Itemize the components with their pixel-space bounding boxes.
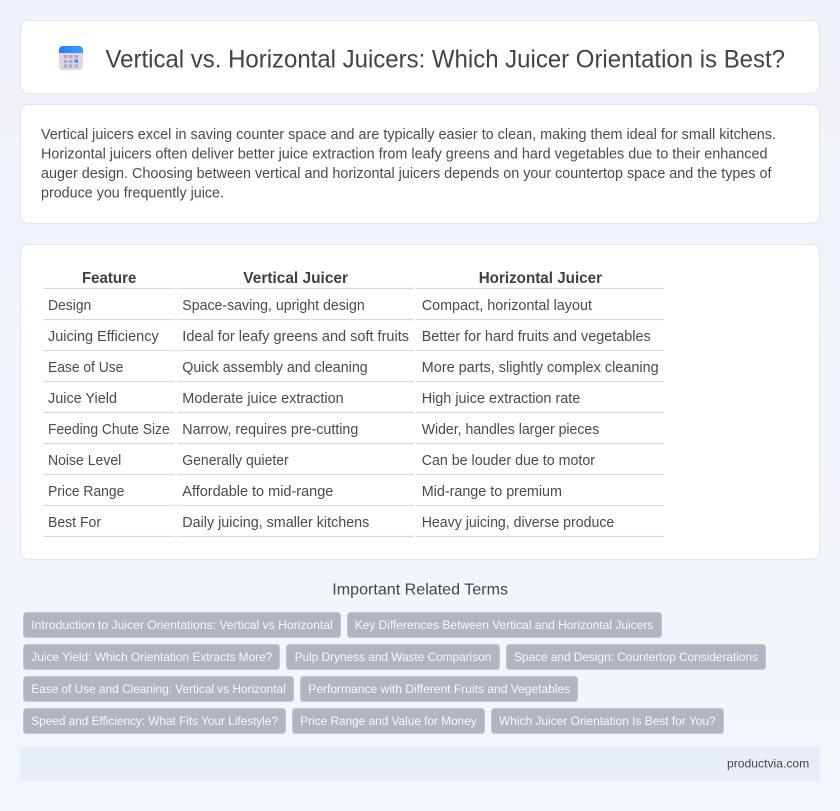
table row: Best For: Heavy juicing, diverse produce (422, 515, 614, 531)
table header row (43, 270, 664, 288)
tag: space and design: Space and Design: Countertop Considerations (514, 650, 758, 664)
tag: performance: Performance with Different Fruits and Vegetables (308, 682, 570, 696)
icon: calendar (59, 46, 83, 70)
panel: related term tags (24, 612, 766, 734)
table row: Juicing Efficiency: Better for hard fruits and vegetables (422, 329, 651, 345)
table row: Design: Space-saving, upright design (182, 298, 365, 314)
tag: key differences: Key Differences Between Vertical and Horizontal Juicers (355, 618, 653, 632)
table row: Noise Level: Noise Level (48, 453, 121, 469)
table row: Best For: Best For (48, 515, 101, 531)
table row: Feeding Chute Size: Feeding Chute Size (48, 422, 170, 438)
table row: Feeding Chute Size: Narrow, requires pre-cutting (182, 422, 358, 438)
table header row: Vertical Juicer (243, 270, 348, 287)
tag: juice yield (24, 644, 280, 670)
table row: Feeding Chute Size (43, 422, 664, 444)
table row: Noise Level: Can be louder due to motor (422, 453, 595, 469)
footer (20, 747, 820, 781)
table row: Design (43, 298, 664, 320)
text block: summary paragraph: Horizontal juicers often deliver better juice extraction from leafy greens and hard vegetables due to their enhanced (41, 146, 768, 162)
panel: introduction text (20, 104, 820, 224)
table row: Price Range: Affordable to mid-range (182, 484, 333, 500)
tag: which orientation (492, 708, 724, 734)
tag: speed and efficiency (24, 708, 286, 734)
tag: price range (292, 708, 484, 734)
table row: Price Range (43, 484, 664, 506)
panel: title header (20, 20, 820, 94)
tag: ease of use: Ease of Use and Cleaning: Vertical vs Horizontal (31, 682, 286, 696)
table row: Ease of Use: More parts, slightly complex cleaning (422, 360, 659, 376)
table row: Juicing Efficiency: Ideal for leafy greens and soft fruits (182, 329, 409, 345)
tag: which orientation: Which Juicer Orientation Is Best for You? (499, 714, 716, 728)
table row: Juice Yield: High juice extraction rate (422, 391, 580, 407)
table row: Design: Compact, horizontal layout (422, 298, 592, 314)
table row: Juicing Efficiency (43, 329, 664, 350)
footer source text: productvia.com (727, 756, 809, 770)
text block: summary paragraph (41, 127, 776, 202)
tag: introduction (24, 612, 340, 638)
tag: ease of use (24, 676, 294, 702)
table row: Ease of Use: Ease of Use (48, 360, 123, 376)
table row: Best For: Daily juicing, smaller kitchens (182, 515, 369, 531)
table header row: Horizontal Juicer (479, 270, 602, 287)
table row: Juice Yield: Moderate juice extraction (182, 391, 344, 407)
table row: Juice Yield (43, 391, 664, 412)
tag: space and design (506, 644, 766, 670)
tag: speed and efficiency: Speed and Efficiency: What Fits Your Lifestyle? (31, 714, 278, 728)
heading: related terms: Important Related Terms (332, 582, 508, 598)
text block: summary paragraph: produce you frequently juice. (41, 186, 224, 202)
tag: introduction: Introduction to Juicer Orientations: Vertical vs Horizontal (31, 618, 333, 632)
tag: performance (300, 676, 578, 702)
title: Vertical vs. Horizontal Juicers: Which Juicer Orientation is Best? (106, 46, 785, 74)
table row: Best For (43, 515, 664, 536)
tag: key differences (348, 612, 662, 638)
table row: Ease of Use (43, 360, 664, 382)
tag: juice yield: Juice Yield: Which Orientation Extracts More? (31, 650, 273, 664)
table row: Ease of Use: Quick assembly and cleaning (182, 360, 368, 376)
table row: Feeding Chute Size: Wider, handles larger pieces (422, 422, 599, 438)
table row: Price Range: Price Range (48, 484, 124, 500)
tag: pulp dryness (286, 644, 500, 670)
table row: Design: Design (48, 298, 91, 314)
table row: Juicing Efficiency: Juicing Efficiency (48, 329, 159, 345)
text block: summary paragraph: Vertical juicers excel in saving counter space and are typically easier to clean, making them ideal for small kitchens. (41, 127, 776, 143)
tag: price range: Price Range and Value for Money (300, 714, 478, 728)
table row: Noise Level (43, 453, 664, 474)
table header row: Feature (82, 270, 136, 287)
panel: comparison table (20, 244, 820, 560)
table row: Price Range: Mid-range to premium (422, 484, 562, 500)
table row: Juice Yield: Juice Yield (48, 391, 117, 407)
table row: Noise Level: Generally quieter (182, 453, 289, 469)
tag: pulp dryness: Pulp Dryness and Waste Comparison (295, 650, 491, 664)
text block: summary paragraph: auger design. Choosing between vertical and horizontal juicers depends on your countertop space and the types of (41, 166, 772, 182)
